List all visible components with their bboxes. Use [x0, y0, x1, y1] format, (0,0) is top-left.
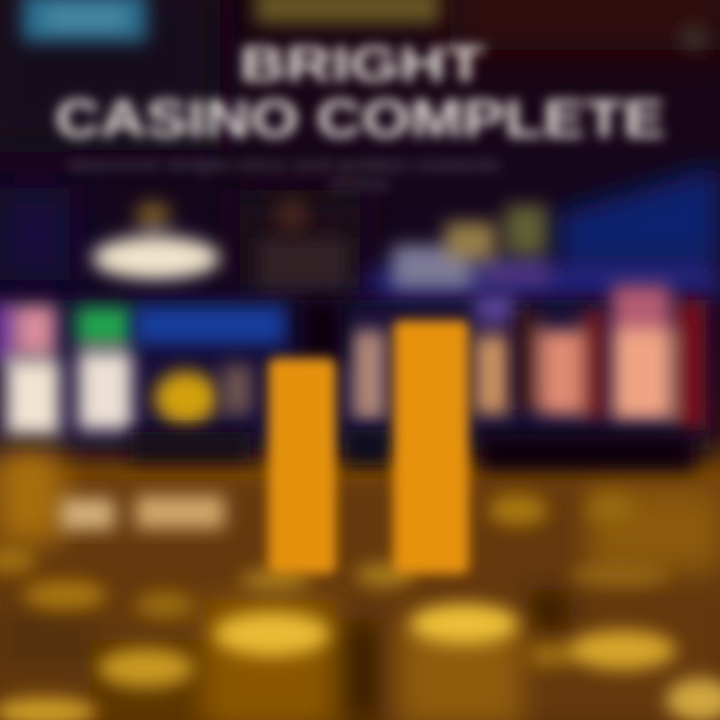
title line 1: BRIGHT: [240, 36, 484, 92]
colourful sign: [392, 205, 550, 293]
machine 2: [76, 307, 132, 430]
coin: mid row: [528, 643, 572, 667]
machine 6: [516, 310, 606, 420]
machine shadows: [480, 435, 695, 475]
coin: bottom right: [666, 678, 720, 720]
chandelier: [92, 202, 220, 280]
blue light panel: [370, 165, 720, 296]
machine 5: [474, 295, 515, 415]
subtitle: [70, 157, 500, 191]
machine 4: [352, 330, 386, 420]
coin column right: [393, 320, 469, 574]
coin: front centre left: [214, 612, 330, 656]
coin: row centre: [355, 563, 415, 587]
coin: bottom left: [0, 698, 97, 720]
coin field: [0, 450, 720, 720]
slot machine row: [0, 285, 710, 475]
title line 2: CASINO COMPLETE: [55, 89, 665, 149]
coin: front centre right: [410, 604, 518, 644]
coin: front left: [98, 648, 194, 688]
blue strip: [135, 306, 285, 344]
ceiling tones: [0, 0, 720, 300]
machine 7: [612, 285, 706, 430]
coin column left: [268, 358, 336, 574]
top right icon: [681, 25, 707, 51]
title: [55, 36, 665, 149]
top left badge: [22, 0, 147, 42]
coin: mid 2: [135, 591, 195, 619]
subtitle: today: [330, 176, 391, 191]
machine band: [0, 300, 710, 450]
coin: far left: [0, 546, 36, 574]
top center gold emblem: [255, 0, 440, 24]
machine 3 gold: [154, 371, 218, 425]
coin: mid left: [23, 580, 107, 610]
column shadow: [300, 300, 342, 362]
machine 1: [0, 302, 60, 435]
coin: front right: [568, 630, 676, 670]
central dark sign: [258, 238, 348, 296]
label block on coins: [60, 495, 225, 530]
subtitle: Discover bright wins and golden rewards: [70, 157, 500, 174]
coin tops: [0, 494, 720, 720]
coin: mid right: [488, 494, 548, 526]
coin: mid right 2: [586, 494, 634, 522]
